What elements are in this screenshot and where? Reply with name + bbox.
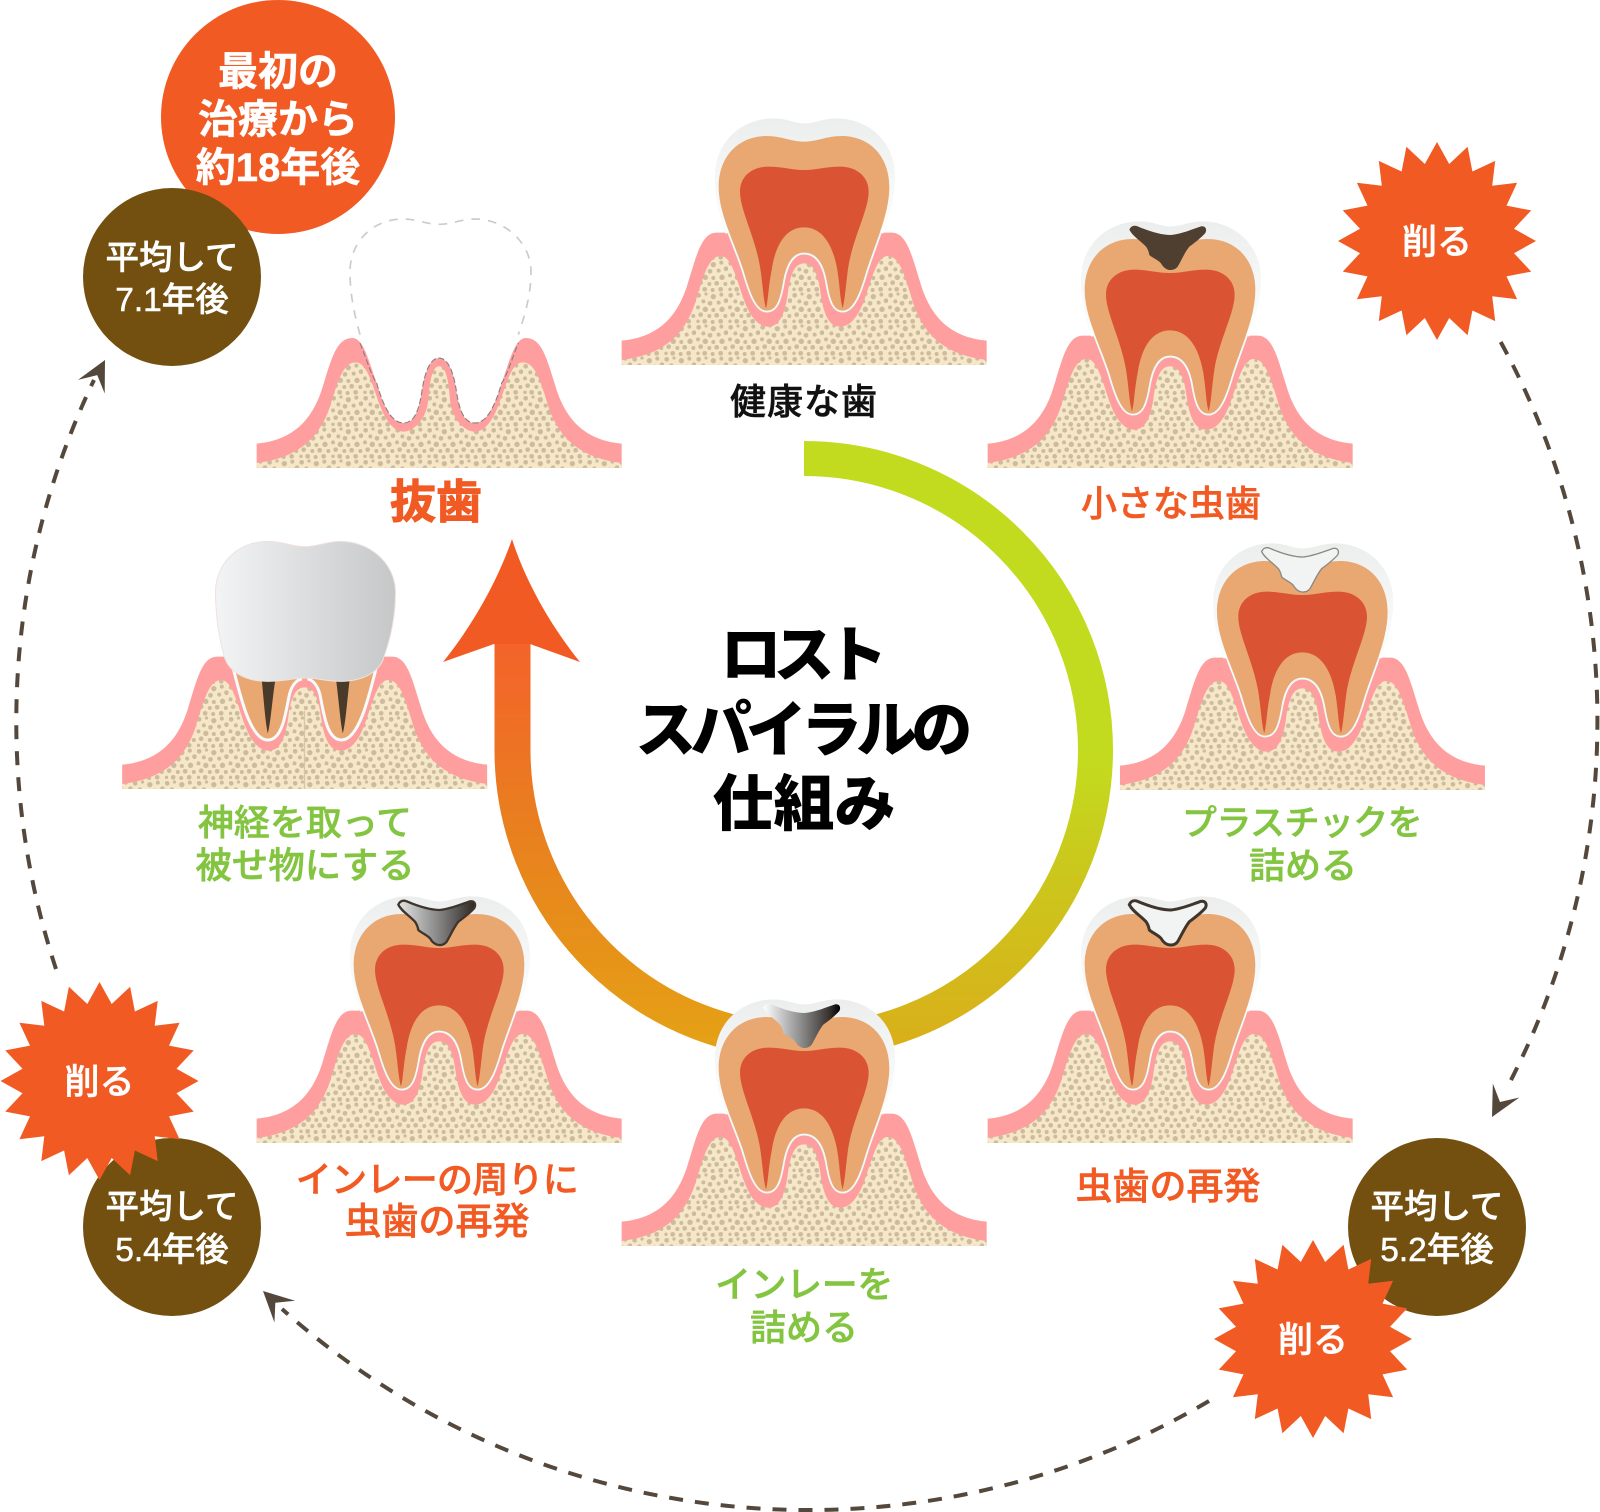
label: decay around inlay (296, 1159, 578, 1242)
badge: 5.4 years: 平均して (106, 1189, 238, 1226)
tooth: crown (122, 541, 487, 789)
label: decay around inlay: 虫歯の再発 (344, 1201, 530, 1242)
label: crown: 被せ物にする (195, 845, 415, 886)
label: decay around inlay: インレーの周りに (296, 1159, 578, 1200)
dashed arc arrow: bottom right to bottom left (282, 1309, 1209, 1510)
tooth: decay around inlay (257, 896, 622, 1143)
label: crown (195, 802, 415, 886)
badge: 7.1 years: 平均して (106, 240, 238, 277)
label: small cavity: 小さな虫歯 (1081, 483, 1261, 524)
badge: 5.2 years (1348, 1138, 1526, 1316)
badge: 5.4 years (83, 1138, 261, 1316)
burst: cut, top right (1338, 142, 1536, 340)
dashed arc arrow: left side going up (16, 380, 94, 969)
arrowhead: top left (78, 353, 118, 394)
tooth: extraction (257, 219, 622, 468)
label: inlay: インレーを (715, 1264, 893, 1305)
burst: cut, left: 削る (64, 1063, 135, 1102)
arrowhead: bottom left (253, 1280, 295, 1323)
label: plastic filling: 詰める (1249, 845, 1357, 886)
badge: 5.2 years: 平均して (1370, 1189, 1504, 1226)
label: inlay: 詰める (750, 1307, 858, 1348)
badge: first treatment: 約18年後 (196, 146, 360, 190)
badge: first treatment: 治療から (198, 98, 358, 142)
burst: cut, top right: 削る (1402, 223, 1472, 262)
badge: first treatment: 最初の (218, 50, 338, 94)
badge: 5.4 years: 5.4年後 (115, 1232, 229, 1269)
center title: 仕組み (712, 770, 896, 838)
center title (635, 621, 969, 838)
label: plastic filling (1182, 804, 1422, 886)
label: crown: 神経を取って (198, 802, 412, 843)
tooth: inlay (622, 999, 987, 1246)
badge: 7.1 years: 7.1年後 (115, 282, 229, 319)
tooth: small cavity (988, 221, 1353, 468)
label: inlay (715, 1264, 893, 1348)
burst: cut, bottom right: 削る (1278, 1321, 1348, 1360)
label: extraction: 抜歯 (390, 476, 482, 528)
center title: スパイラルの (635, 696, 969, 764)
spiral ring: orange arc with arrow (443, 539, 804, 1042)
label: healthy tooth: 健康な歯 (730, 381, 878, 422)
dashed arc arrow: top right to bottom right (1501, 342, 1597, 1082)
tooth: plastic filling (1120, 543, 1485, 790)
arrowhead: bottom right (1479, 1083, 1519, 1124)
label: recurrent decay: 虫歯の再発 (1076, 1166, 1260, 1207)
label: plastic filling: プラスチックを (1182, 804, 1422, 843)
spiral ring: green arc (804, 458, 1096, 1042)
tooth: recurrent decay (988, 896, 1353, 1143)
tooth: healthy (622, 118, 987, 365)
badge: 7.1 years (83, 188, 261, 366)
badge: 5.2 years: 5.2年後 (1380, 1232, 1494, 1269)
burst: cut, left (0, 982, 198, 1180)
burst: cut, bottom right (1214, 1240, 1412, 1438)
badge: first treatment (161, 0, 395, 234)
center title: ロスト (720, 621, 880, 689)
